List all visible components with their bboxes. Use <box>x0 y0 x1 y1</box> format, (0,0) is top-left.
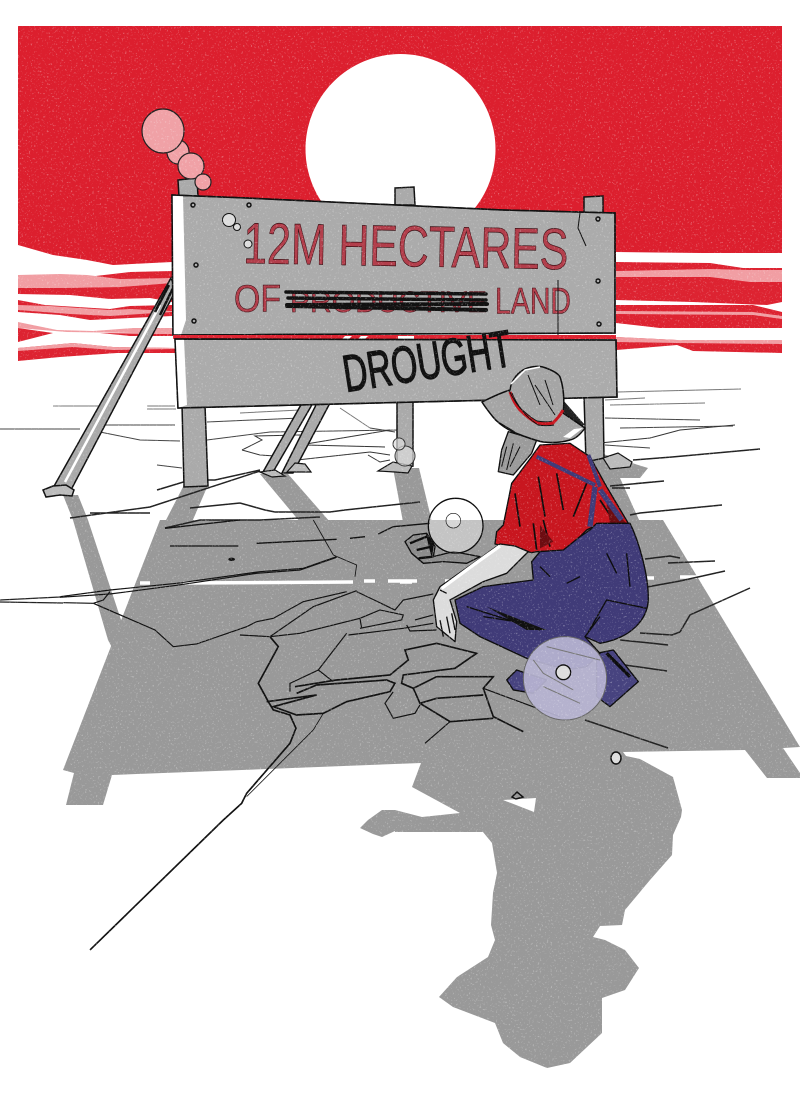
near shoe <box>507 650 638 707</box>
strikethrough scribble <box>286 292 487 310</box>
hair <box>498 432 537 475</box>
graffiti: drought: DROUGHT <box>339 320 516 404</box>
farmer <box>405 432 648 720</box>
ground cracks: main fissure <box>60 520 560 950</box>
post shadows <box>165 485 208 522</box>
crystal orb near hand <box>428 498 483 553</box>
near arm and hand <box>433 544 528 642</box>
sign subheading: struck word: PRODUCTIVE <box>290 286 487 319</box>
sign subheading: land: LAND <box>495 280 571 322</box>
panel: red sky <box>18 26 782 265</box>
sign: lower board <box>175 320 617 408</box>
ground shadow of sign and farmer <box>63 450 800 1068</box>
dashed road line <box>140 577 697 583</box>
small orbs by centre post <box>393 438 415 466</box>
sign: top board <box>172 195 615 335</box>
crystal orb near foot <box>523 637 607 720</box>
sun <box>306 54 496 244</box>
ground cracks: far lines <box>0 389 760 748</box>
strut: leaning brace <box>43 278 176 497</box>
bubbles: top left <box>142 109 211 190</box>
small marks on shadow <box>512 752 621 799</box>
sign bubbles and cracks <box>222 213 586 335</box>
post base rocks <box>260 453 632 477</box>
gap between boards <box>173 335 616 339</box>
far forearm and hand <box>405 533 480 563</box>
sign subheading: of: OF <box>234 278 281 320</box>
overalls <box>455 455 648 670</box>
sign posts <box>178 178 604 487</box>
horizon bands: left <box>18 271 175 361</box>
sign heading: 12M hectares: 12M HECTARES <box>243 211 569 282</box>
shirt <box>495 443 628 553</box>
horizon bands: right <box>616 262 782 353</box>
nails <box>191 203 601 326</box>
farmer hat <box>482 366 585 443</box>
white gap in shadow <box>503 798 536 812</box>
